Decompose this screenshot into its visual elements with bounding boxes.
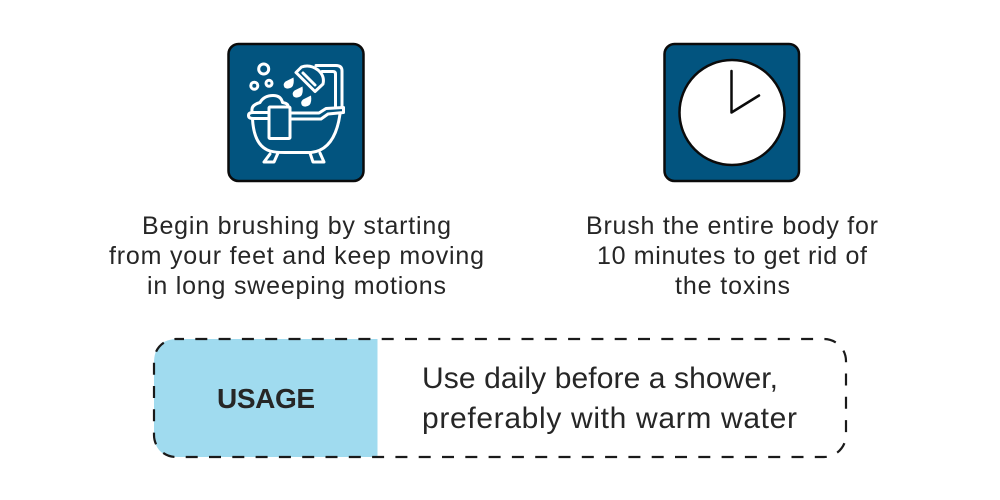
usage text: preferably with warm water xyxy=(422,402,797,435)
text: brushing duration xyxy=(586,212,878,300)
text: brushing instruction: from your feet and keep moving xyxy=(109,242,484,270)
text: brushing duration: Brush the entire body for xyxy=(586,212,878,240)
usage label background xyxy=(154,339,378,457)
usage text: Use daily before a shower, xyxy=(422,362,778,395)
text: brushing instruction: in long sweeping motions xyxy=(147,272,446,300)
icon: clock xyxy=(664,44,799,181)
icon: bathtub with shower xyxy=(228,44,364,181)
text: brushing instruction: Begin brushing by starting xyxy=(142,212,451,240)
text: brushing instruction xyxy=(109,212,484,300)
panel: usage xyxy=(154,339,846,457)
usage text xyxy=(422,362,797,435)
usage heading: USAGE xyxy=(217,383,315,414)
text: brushing duration: the toxins xyxy=(675,272,790,300)
text: brushing duration: 10 minutes to get rid of xyxy=(597,242,867,270)
